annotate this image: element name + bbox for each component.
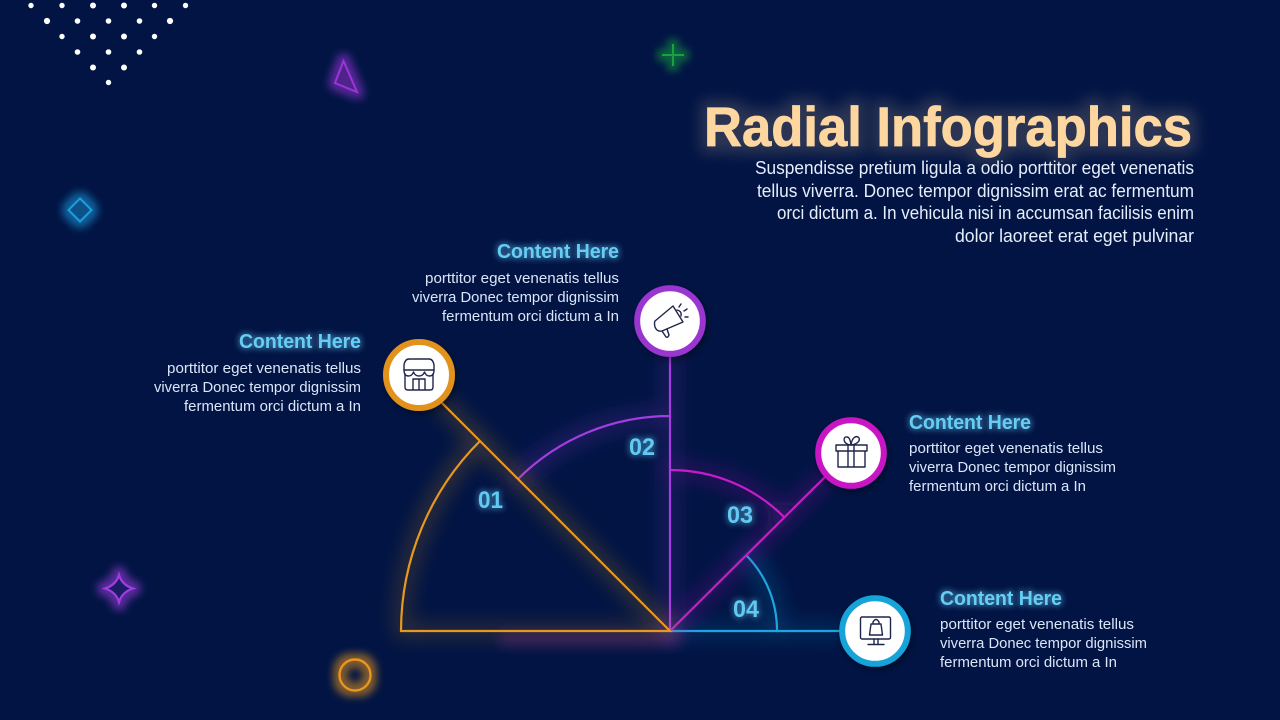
content block 04 [940, 588, 1147, 671]
icon: neon circle [340, 660, 370, 690]
content block 03: fermentum orci dictum a In [909, 479, 1086, 495]
icon: neon plus [662, 44, 684, 66]
content block 02 [412, 241, 619, 325]
content block 03: porttitor eget venenatis tellus [909, 441, 1103, 457]
number 01: 01 [478, 487, 503, 514]
content block 04: viverra Donec tempor dignissim [940, 636, 1147, 652]
node 04: online shop icon [842, 598, 908, 664]
content block 01: fermentum orci dictum a In [184, 399, 361, 415]
content block 02: fermentum orci dictum a In [442, 309, 619, 325]
content block 01: viverra Donec tempor dignissim [154, 380, 361, 396]
number 02: 02 [629, 434, 655, 461]
icon: neon star [105, 575, 133, 602]
content block 02: porttitor eget venenatis tellus [425, 271, 619, 287]
content block 04: porttitor eget venenatis tellus [940, 617, 1134, 633]
number 04: 04 [733, 596, 760, 623]
description text: Suspendisse pretium ligula a odio porttitor eget venenatis [755, 158, 1194, 178]
content block 03: viverra Donec tempor dignissim [909, 460, 1116, 476]
description text [755, 158, 1194, 246]
content block 01: Content Here [239, 331, 361, 353]
title: Radial Infographics [704, 95, 1192, 158]
number 03: 03 [727, 502, 753, 529]
node 02: megaphone icon [637, 288, 703, 354]
radial chart [401, 350, 840, 644]
content block 01: porttitor eget venenatis tellus [167, 361, 361, 377]
content block 04: fermentum orci dictum a In [940, 655, 1117, 671]
glow under chart base [500, 634, 680, 644]
description text: orci dictum a. In vehicula nisi in accumsan facilisis enim [777, 203, 1194, 223]
icon: neon diamond [68, 198, 92, 222]
node 03: gift icon [818, 420, 884, 486]
segment 04 blue [670, 555, 840, 631]
content block 03: Content Here [909, 412, 1031, 434]
content block 02: viverra Donec tempor dignissim [412, 290, 619, 306]
description text: tellus viverra. Donec tempor dignissim erat ac fermentum [757, 181, 1194, 201]
content block 03 [909, 412, 1116, 495]
description text: dolor laoreet erat eget pulvinar [955, 226, 1194, 246]
segment 03 magenta [670, 470, 826, 631]
dot pattern [28, 2, 188, 85]
icon: neon triangle [335, 61, 357, 92]
content block 01 [154, 331, 361, 415]
content block 04: Content Here [940, 588, 1062, 610]
node 01: store icon [386, 342, 452, 408]
content block 02: Content Here [497, 241, 619, 263]
segment 02 purple [518, 350, 670, 631]
segment 01 orange [401, 403, 670, 631]
